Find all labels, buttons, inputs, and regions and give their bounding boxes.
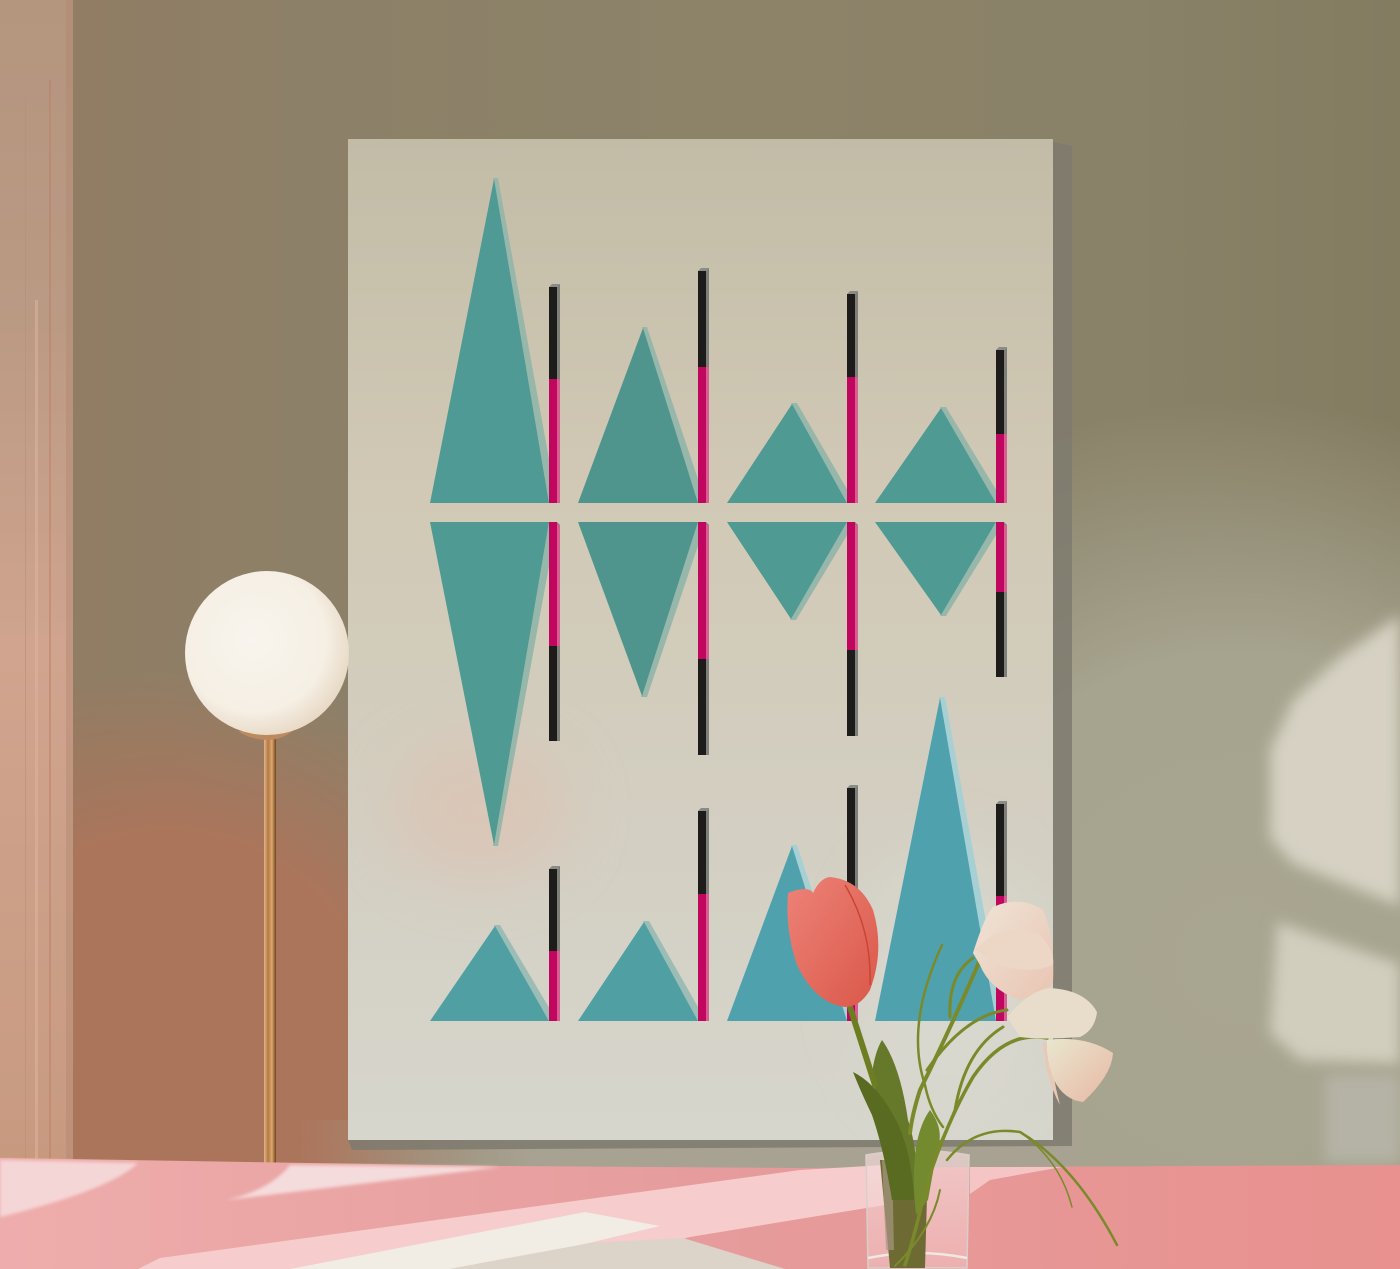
poster shadow [348,142,1072,1150]
triangle 2 [578,808,709,1021]
sunlight on table [0,1160,1062,1269]
diamond upper 3 [727,291,858,503]
diamond lower 2 [578,522,709,755]
diamond upper 2 [578,268,709,503]
triangle 1 [430,866,560,1021]
pale tulips [973,902,1113,1105]
curtain [0,0,73,1170]
diamond upper 1 [430,178,560,503]
diamond lower 1 [430,522,560,846]
patch lower [1270,922,1400,1064]
chart group: row three [430,697,1007,1021]
chart group: row one [430,178,1007,503]
diamond lower 3 [727,522,858,736]
paper on table [449,1238,785,1269]
triangle 4 [875,697,1007,1021]
glass vase [866,1150,969,1268]
sunlight patches on wall [1270,615,1400,1162]
leaves [853,1040,940,1215]
patch faint [1325,1075,1400,1162]
diamond lower 4 [875,522,1007,677]
table [0,1158,1400,1269]
chart group: row two [430,522,1007,846]
triangle 3 [727,785,858,1021]
patch upper [1270,615,1400,906]
stems [850,945,1117,1266]
poster [348,139,1053,1140]
floor lamp [185,571,349,1164]
diamond upper 4 [875,347,1007,503]
vase with tulips [787,877,1117,1268]
coral tulip [787,877,878,1007]
